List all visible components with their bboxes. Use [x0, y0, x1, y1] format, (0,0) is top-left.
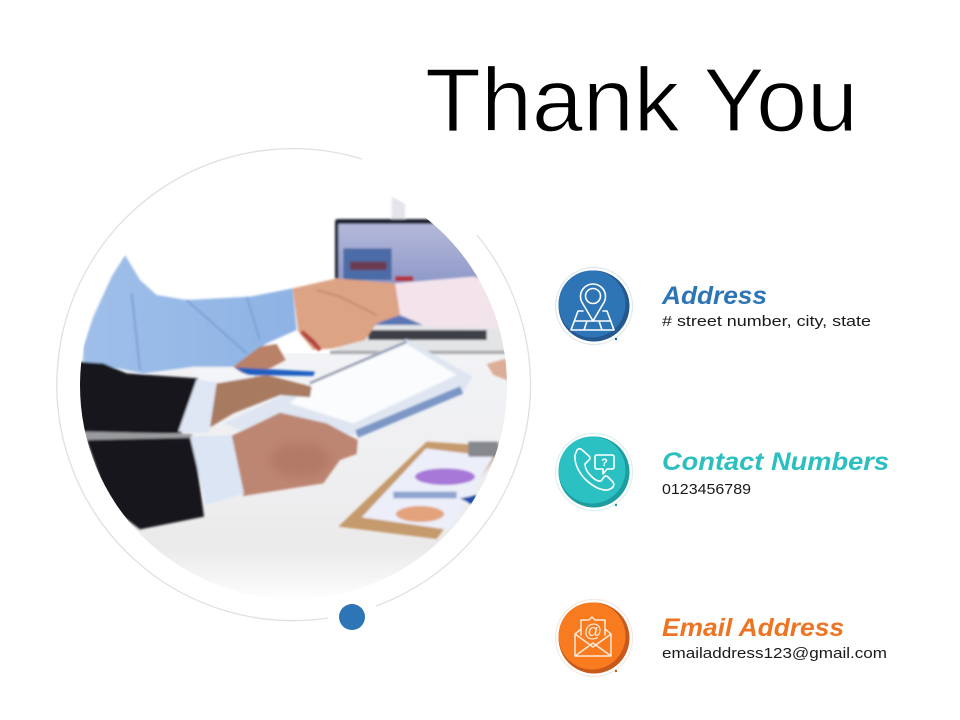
pen	[235, 367, 315, 376]
icon: phone with question bubble	[556, 434, 632, 510]
title: Thank You	[425, 51, 858, 151]
contact: address	[556, 268, 871, 344]
text: email: emailaddress123@gmail.com	[662, 645, 887, 662]
lower hand	[230, 413, 358, 496]
laptop	[330, 219, 510, 354]
hand under sleeve	[233, 344, 286, 374]
lower cuff	[190, 435, 244, 505]
photo: business handshake	[80, 197, 507, 582]
strip between suits	[85, 430, 194, 442]
text: address detail: # street number, city, state	[662, 313, 871, 330]
wall post	[392, 197, 405, 220]
clipboard	[338, 442, 503, 539]
thank you slide	[56, 66, 888, 677]
dark suit upper	[78, 362, 198, 433]
paper	[193, 370, 273, 397]
icon: envelope: @	[584, 621, 602, 641]
blue shirt sleeve	[83, 255, 297, 373]
tablet	[223, 339, 473, 435]
handshake	[293, 278, 400, 350]
icon: phone with question bubble: ?	[601, 457, 608, 469]
hand shading	[274, 446, 326, 474]
icon: envelope	[556, 600, 632, 676]
contact: email	[556, 600, 887, 676]
decorative ring around photo	[57, 149, 530, 621]
text: phone number: 0123456789	[662, 481, 751, 498]
heading: contact numbers: Contact Numbers	[662, 448, 889, 476]
contact: phone	[556, 434, 889, 510]
dark suit lower	[87, 438, 204, 529]
icon: map pin	[556, 268, 632, 344]
pink sleeve	[395, 277, 500, 328]
small hand right	[487, 358, 508, 381]
table	[82, 354, 507, 582]
upper hand	[210, 375, 312, 427]
heading: email address: Email Address	[662, 614, 844, 642]
ring marker dot	[339, 604, 365, 630]
upper cuff	[178, 379, 218, 433]
heading: address: Address	[661, 282, 767, 310]
